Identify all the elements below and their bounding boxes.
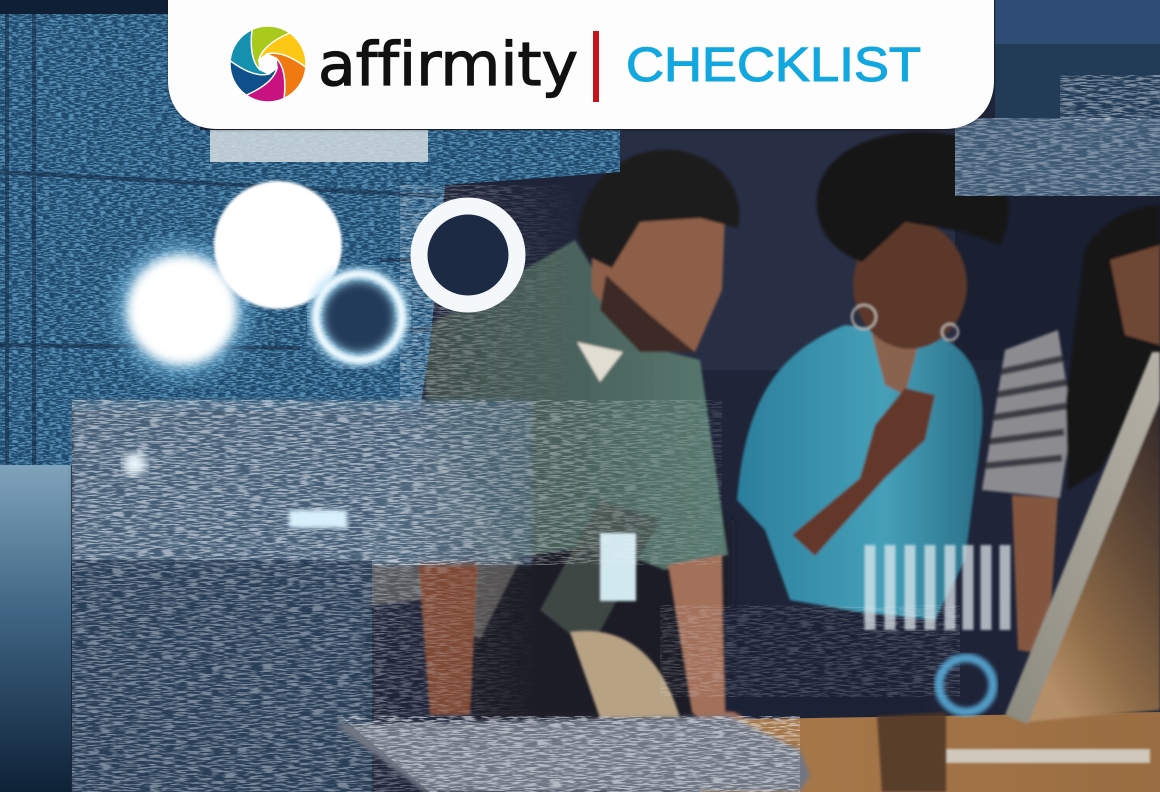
third person: striped shirt bbox=[982, 330, 1072, 498]
man: beard bbox=[600, 275, 695, 352]
man: ghost back sleeve bbox=[335, 420, 520, 640]
man: hair bbox=[578, 150, 739, 268]
glowing data circles bbox=[116, 181, 993, 712]
woman: afro hair bbox=[817, 132, 1009, 262]
man: sleeve stripe bbox=[540, 500, 660, 650]
coffee cup bbox=[877, 712, 946, 792]
man: undershirt bbox=[577, 342, 623, 382]
monitor frame bbox=[1005, 352, 1160, 724]
code overlay: man's shoulder bbox=[400, 185, 561, 400]
man: torso and shirt bbox=[420, 240, 728, 570]
woman: face bbox=[853, 221, 967, 349]
top right data panel bbox=[955, 75, 1160, 196]
white disc bbox=[214, 181, 342, 309]
chair bbox=[570, 631, 680, 718]
woman: raised arm bbox=[792, 388, 935, 556]
divider bbox=[593, 31, 599, 102]
man: forearm right bbox=[668, 555, 800, 748]
code overlay: centre band bbox=[72, 400, 722, 565]
woman: trousers bbox=[722, 610, 935, 722]
blurred ring bbox=[323, 281, 395, 353]
bright window bbox=[600, 533, 636, 601]
third person bbox=[982, 205, 1160, 655]
man: forearm left bbox=[418, 560, 478, 715]
header card bbox=[168, 0, 994, 129]
man bbox=[335, 150, 800, 748]
papers and hands on desk bbox=[335, 716, 810, 792]
blue ring lower right bbox=[939, 658, 993, 712]
code overlay: lower left bbox=[72, 560, 542, 792]
code overlay: upper left bbox=[0, 14, 620, 465]
woman: blouse bbox=[737, 325, 982, 620]
code strip centre bbox=[660, 605, 960, 697]
glow disc bbox=[116, 244, 248, 376]
desk bbox=[700, 712, 1160, 792]
white ring bbox=[426, 213, 510, 297]
data bar overlay bbox=[210, 130, 428, 162]
monitor back bbox=[1025, 400, 1160, 722]
computer monitor bbox=[1005, 352, 1160, 724]
people bbox=[335, 132, 1160, 748]
wordmark: affirmity: affirmity bbox=[318, 30, 578, 100]
left sidebar glow panel bbox=[0, 465, 71, 792]
third person: hair bbox=[1066, 205, 1160, 490]
man: face bbox=[592, 175, 725, 352]
third person: face bbox=[1110, 245, 1160, 345]
bar chart overlay bbox=[870, 545, 1005, 630]
code over papers bbox=[340, 716, 800, 792]
woman: earring bbox=[852, 305, 876, 329]
third person: arm bbox=[1012, 495, 1058, 655]
woman bbox=[722, 132, 1009, 722]
woman: chest bbox=[868, 320, 925, 395]
heading: CHECKLIST: CHECKLIST bbox=[626, 39, 921, 92]
keyboard bbox=[945, 749, 1150, 763]
icon: affirmity aperture logo bbox=[219, 16, 317, 112]
dark grid lines bbox=[0, 14, 470, 465]
small glows bbox=[123, 452, 147, 476]
